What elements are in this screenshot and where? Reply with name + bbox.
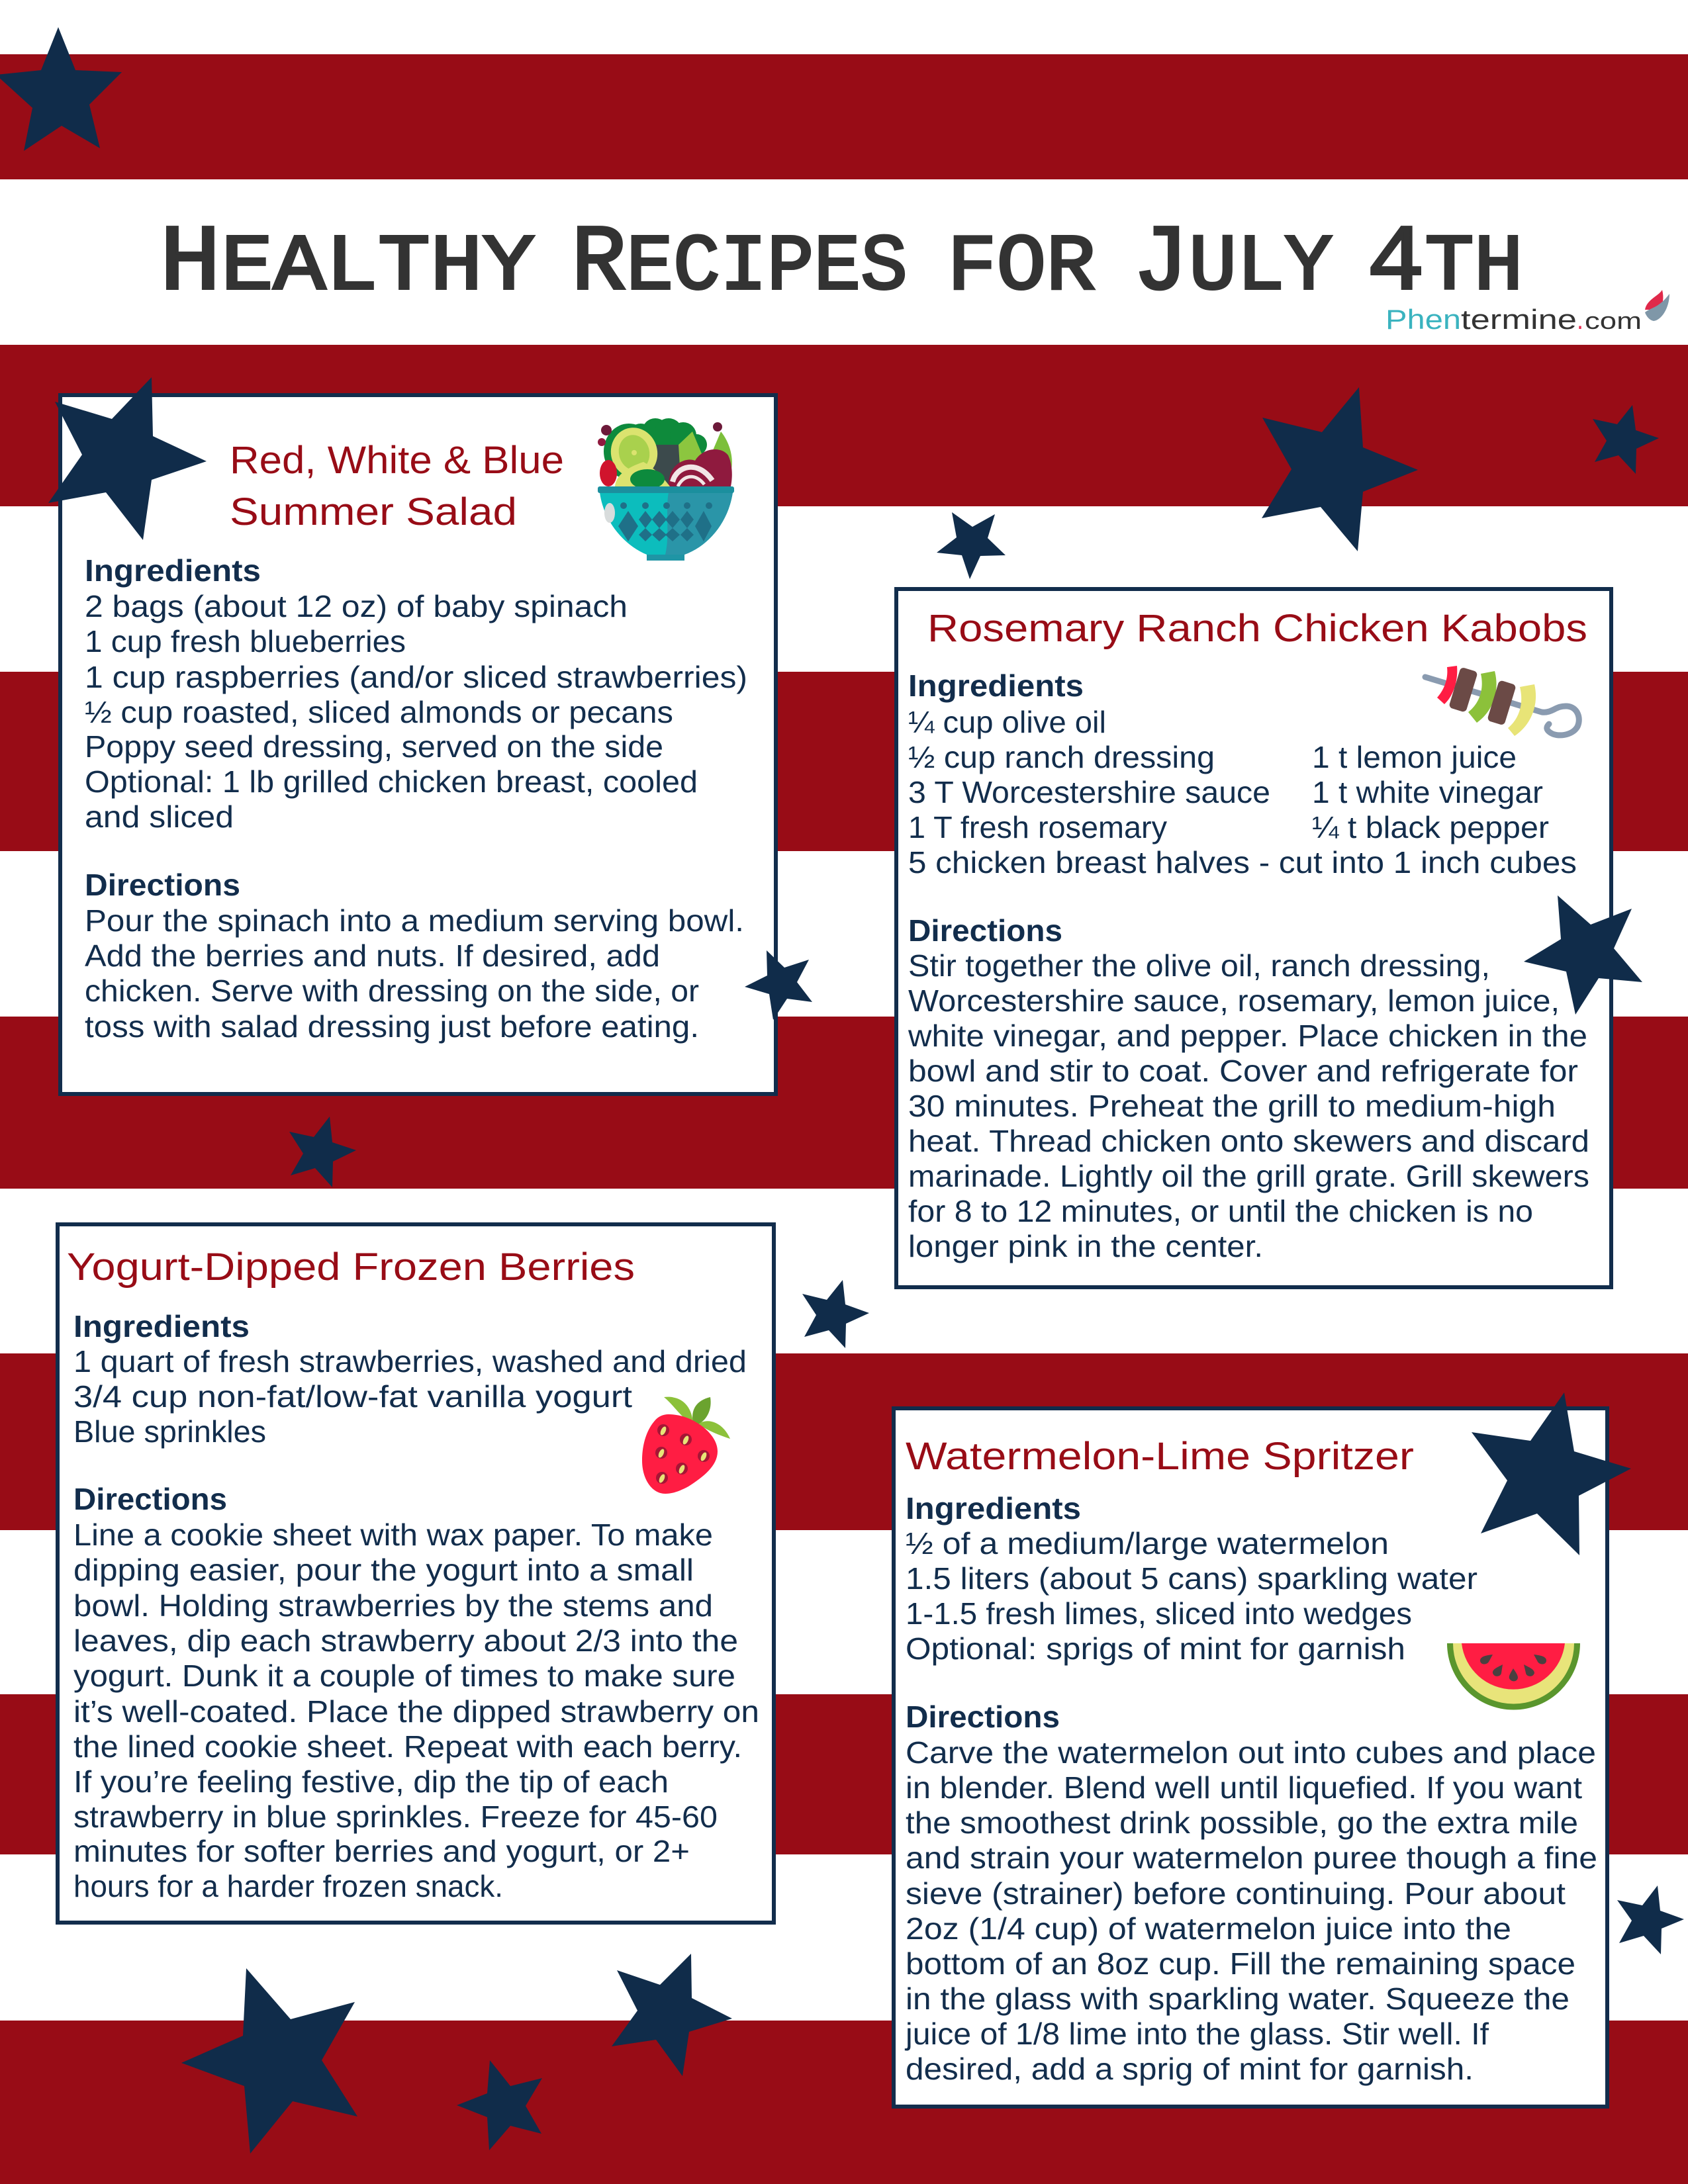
star: between cards centre: [802, 1280, 869, 1348]
text: berries directions: the lined cookie sheet. Repeat with each berry.: [73, 1729, 742, 1764]
text: berries directions: bowl. Holding strawberries by the stems and: [73, 1588, 713, 1623]
text: kabob ingredients: [908, 668, 1577, 880]
text: berries ingredients: Ingredients: [73, 1309, 250, 1343]
icon: strawberry: [642, 1397, 730, 1494]
star: below salad card: [289, 1116, 356, 1187]
text: salad directions: Add the berries and nuts. If desired, add: [85, 938, 660, 973]
text: berries ingredients: Blue sprinkles: [73, 1414, 266, 1449]
text: spritzer directions: [904, 1700, 1597, 2086]
logo: Phentermine.com: com: [1585, 307, 1642, 334]
title: HEALTHY: [160, 212, 535, 317]
text: kabob directions: heat. Thread chicken onto skewers and discard: [908, 1124, 1589, 1158]
text: salad ingredients: 1 cup fresh blueberries: [85, 624, 406, 659]
icon: watermelon slice: [1447, 1643, 1580, 1710]
logo: Phentermine.com: .: [1577, 304, 1583, 335]
text: berries directions: dipping easier, pour the yogurt into a small: [73, 1553, 694, 1587]
star: salad card corner: [48, 377, 207, 540]
panel: Rosemary Ranch Chicken Kabobs: [896, 589, 1611, 1287]
text: salad ingredients: 2 bags (about 12 oz) of baby spinach: [85, 589, 628, 623]
text: spritzer ingredients: ½ of a medium/large watermelon: [906, 1526, 1389, 1561]
heading: berries: Yogurt-Dipped Frozen Berries: [67, 1246, 635, 1289]
text: kabob directions: Directions: [908, 913, 1062, 948]
text: kabob ingredients: Ingredients: [908, 668, 1084, 703]
text: spritzer ingredients: Ingredients: [906, 1491, 1081, 1525]
text: berries directions: minutes for softer berries and yogurt, or 2+: [73, 1834, 690, 1868]
text: salad directions: toss with salad dressing just before eating.: [85, 1009, 699, 1044]
text: berries directions: it’s well-coated. Place the dipped strawberry on: [73, 1694, 759, 1729]
logo: Phentermine.com: [1385, 290, 1669, 335]
logo: Phentermine.com: termine: [1461, 304, 1577, 335]
text: berries directions: [73, 1482, 759, 1903]
star: kabob card right edge: [1524, 895, 1642, 1015]
panel: Red, White & Blue Summer Salad: [60, 395, 776, 1094]
text: kabob ingredients: 1 t white vinegar: [1312, 775, 1543, 809]
text: kabob directions: Worcestershire sauce, rosemary, lemon juice,: [908, 983, 1560, 1018]
text: spritzer directions: 2oz (1/4 cup) of watermelon juice into the: [906, 1911, 1511, 1946]
text: spritzer directions: sieve (strainer) before continuing. Pour about: [906, 1876, 1566, 1911]
text: salad ingredients: Poppy seed dressing, served on the side: [85, 729, 663, 764]
text: salad directions: Directions: [85, 868, 240, 902]
heading: salad: Summer Salad: [230, 490, 517, 533]
text: kabob ingredients: ½ cup ranch dressing: [908, 740, 1215, 774]
text: kabob ingredients: 5 chicken breast halves - cut into 1 inch cubes: [908, 845, 1577, 880]
text: kabob directions: [908, 913, 1589, 1263]
text: salad ingredients: 1 cup raspberries (and/or sliced strawberries): [85, 660, 747, 694]
text: berries directions: hours for a harder frozen snack.: [73, 1869, 503, 1903]
text: berries directions: yogurt. Dunk it a couple of times to make sure: [73, 1659, 735, 1693]
text: kabob directions: longer pink in the center.: [908, 1229, 1263, 1263]
text: spritzer directions: and strain your watermelon puree though a fine: [906, 1841, 1597, 1875]
text: kabob ingredients: 1 T fresh rosemary: [908, 810, 1167, 844]
text: salad ingredients: and sliced: [85, 799, 234, 834]
text: berries ingredients: [73, 1309, 747, 1449]
star: top left: [0, 27, 122, 151]
icon: kabob skewer: [1425, 666, 1579, 736]
text: salad ingredients: Ingredients: [85, 553, 261, 588]
panel: Watermelon-Lime Spritzer: [894, 1408, 1607, 2107]
logo: Phentermine.com: Phen: [1385, 304, 1461, 335]
heading: spritzer: Watermelon-Lime Spritzer: [906, 1435, 1414, 1478]
text: spritzer directions: Directions: [906, 1700, 1060, 1734]
star: bottom small: [457, 2060, 542, 2150]
title: 4TH: [1367, 212, 1523, 317]
icon: salad bowl: [598, 418, 734, 561]
heading: salad: Red, White & Blue: [230, 439, 564, 482]
text: spritzer directions: bottom of an 8oz cup. Fill the remaining space: [906, 1946, 1575, 1981]
text: spritzer directions: in the glass with sparkling water. Squeeze the: [906, 1981, 1570, 2016]
text: kabob ingredients: 3 T Worcestershire sauce: [908, 775, 1270, 809]
text: spritzer directions: the smoothest drink possible, go the extra mile: [906, 1805, 1578, 1840]
star: right edge lower: [1617, 1886, 1684, 1954]
star: salad card right edge: [745, 950, 812, 1020]
text: salad directions: chicken. Serve with dressing on the side, or: [85, 974, 699, 1008]
star: upper far right: [1593, 405, 1659, 474]
text: spritzer ingredients: [906, 1491, 1477, 1666]
text: kabob ingredients: ¼ cup olive oil: [908, 705, 1106, 739]
text: salad directions: [85, 868, 744, 1044]
text: spritzer ingredients: Optional: sprigs of mint for garnish: [906, 1631, 1405, 1666]
title: RECIPES: [571, 212, 908, 317]
text: berries ingredients: 3/4 cup non-fat/low-fat vanilla yogurt: [73, 1379, 632, 1414]
text: berries directions: leaves, dip each strawberry about 2/3 into the: [73, 1623, 738, 1658]
panel: Yogurt-Dipped Frozen Berries: [58, 1224, 774, 1923]
text: salad ingredients: [85, 553, 747, 834]
text: spritzer directions: in blender. Blend well until liquefied. If you want: [906, 1770, 1582, 1805]
text: kabob directions: for 8 to 12 minutes, or until the chicken is no: [908, 1194, 1533, 1228]
star: spritzer card corner: [1472, 1392, 1631, 1555]
title: FOR: [947, 223, 1096, 313]
text: salad ingredients: ½ cup roasted, sliced almonds or pecans: [85, 695, 673, 729]
title: [160, 212, 1523, 317]
text: kabob directions: marinade. Lightly oil the grill grate. Grill skewers: [908, 1159, 1589, 1193]
text: kabob directions: Stir together the olive oil, ranch dressing,: [908, 948, 1490, 983]
star: upper centre right: [1262, 387, 1418, 551]
heading: salad: [230, 439, 564, 533]
text: berries directions: strawberry in blue sprinkles. Freeze for 45-60: [73, 1799, 718, 1834]
text: spritzer directions: juice of 1/8 lime into the glass. Stir well. If: [904, 2017, 1489, 2051]
text: spritzer directions: desired, add a sprig of mint for garnish.: [906, 2052, 1474, 2086]
text: kabob directions: 30 minutes. Preheat the grill to medium-high: [908, 1089, 1556, 1123]
text: berries directions: Directions: [73, 1482, 227, 1516]
star: bottom left large: [181, 1968, 357, 2154]
text: berries ingredients: 1 quart of fresh strawberries, washed and dried: [73, 1344, 747, 1379]
text: salad ingredients: Optional: 1 lb grilled chicken breast, cooled: [85, 764, 698, 799]
text: berries directions: Line a cookie sheet with wax paper. To make: [73, 1518, 713, 1552]
text: spritzer directions: Carve the watermelon out into cubes and place: [906, 1735, 1596, 1770]
star: bottom medium: [612, 1954, 732, 2076]
text: kabob ingredients: 1 t lemon juice: [1312, 740, 1517, 774]
heading: kabobs: Rosemary Ranch Chicken Kabobs: [927, 607, 1587, 650]
text: berries directions: If you’re feeling festive, dip the tip of each: [73, 1764, 669, 1799]
title: JULY: [1133, 212, 1333, 317]
text: kabob ingredients: ¼ t black pepper: [1312, 810, 1549, 844]
text: spritzer ingredients: 1.5 liters (about 5 cans) sparkling water: [906, 1561, 1477, 1596]
text: salad directions: Pour the spinach into a medium serving bowl.: [85, 903, 744, 938]
text: kabob directions: bowl and stir to coat. Cover and refrigerate for: [908, 1054, 1578, 1088]
text: spritzer ingredients: 1-1.5 fresh limes, sliced into wedges: [906, 1596, 1412, 1631]
star: above kabob card: [937, 512, 1006, 579]
text: kabob directions: white vinegar, and pepper. Place chicken in the: [908, 1019, 1587, 1053]
